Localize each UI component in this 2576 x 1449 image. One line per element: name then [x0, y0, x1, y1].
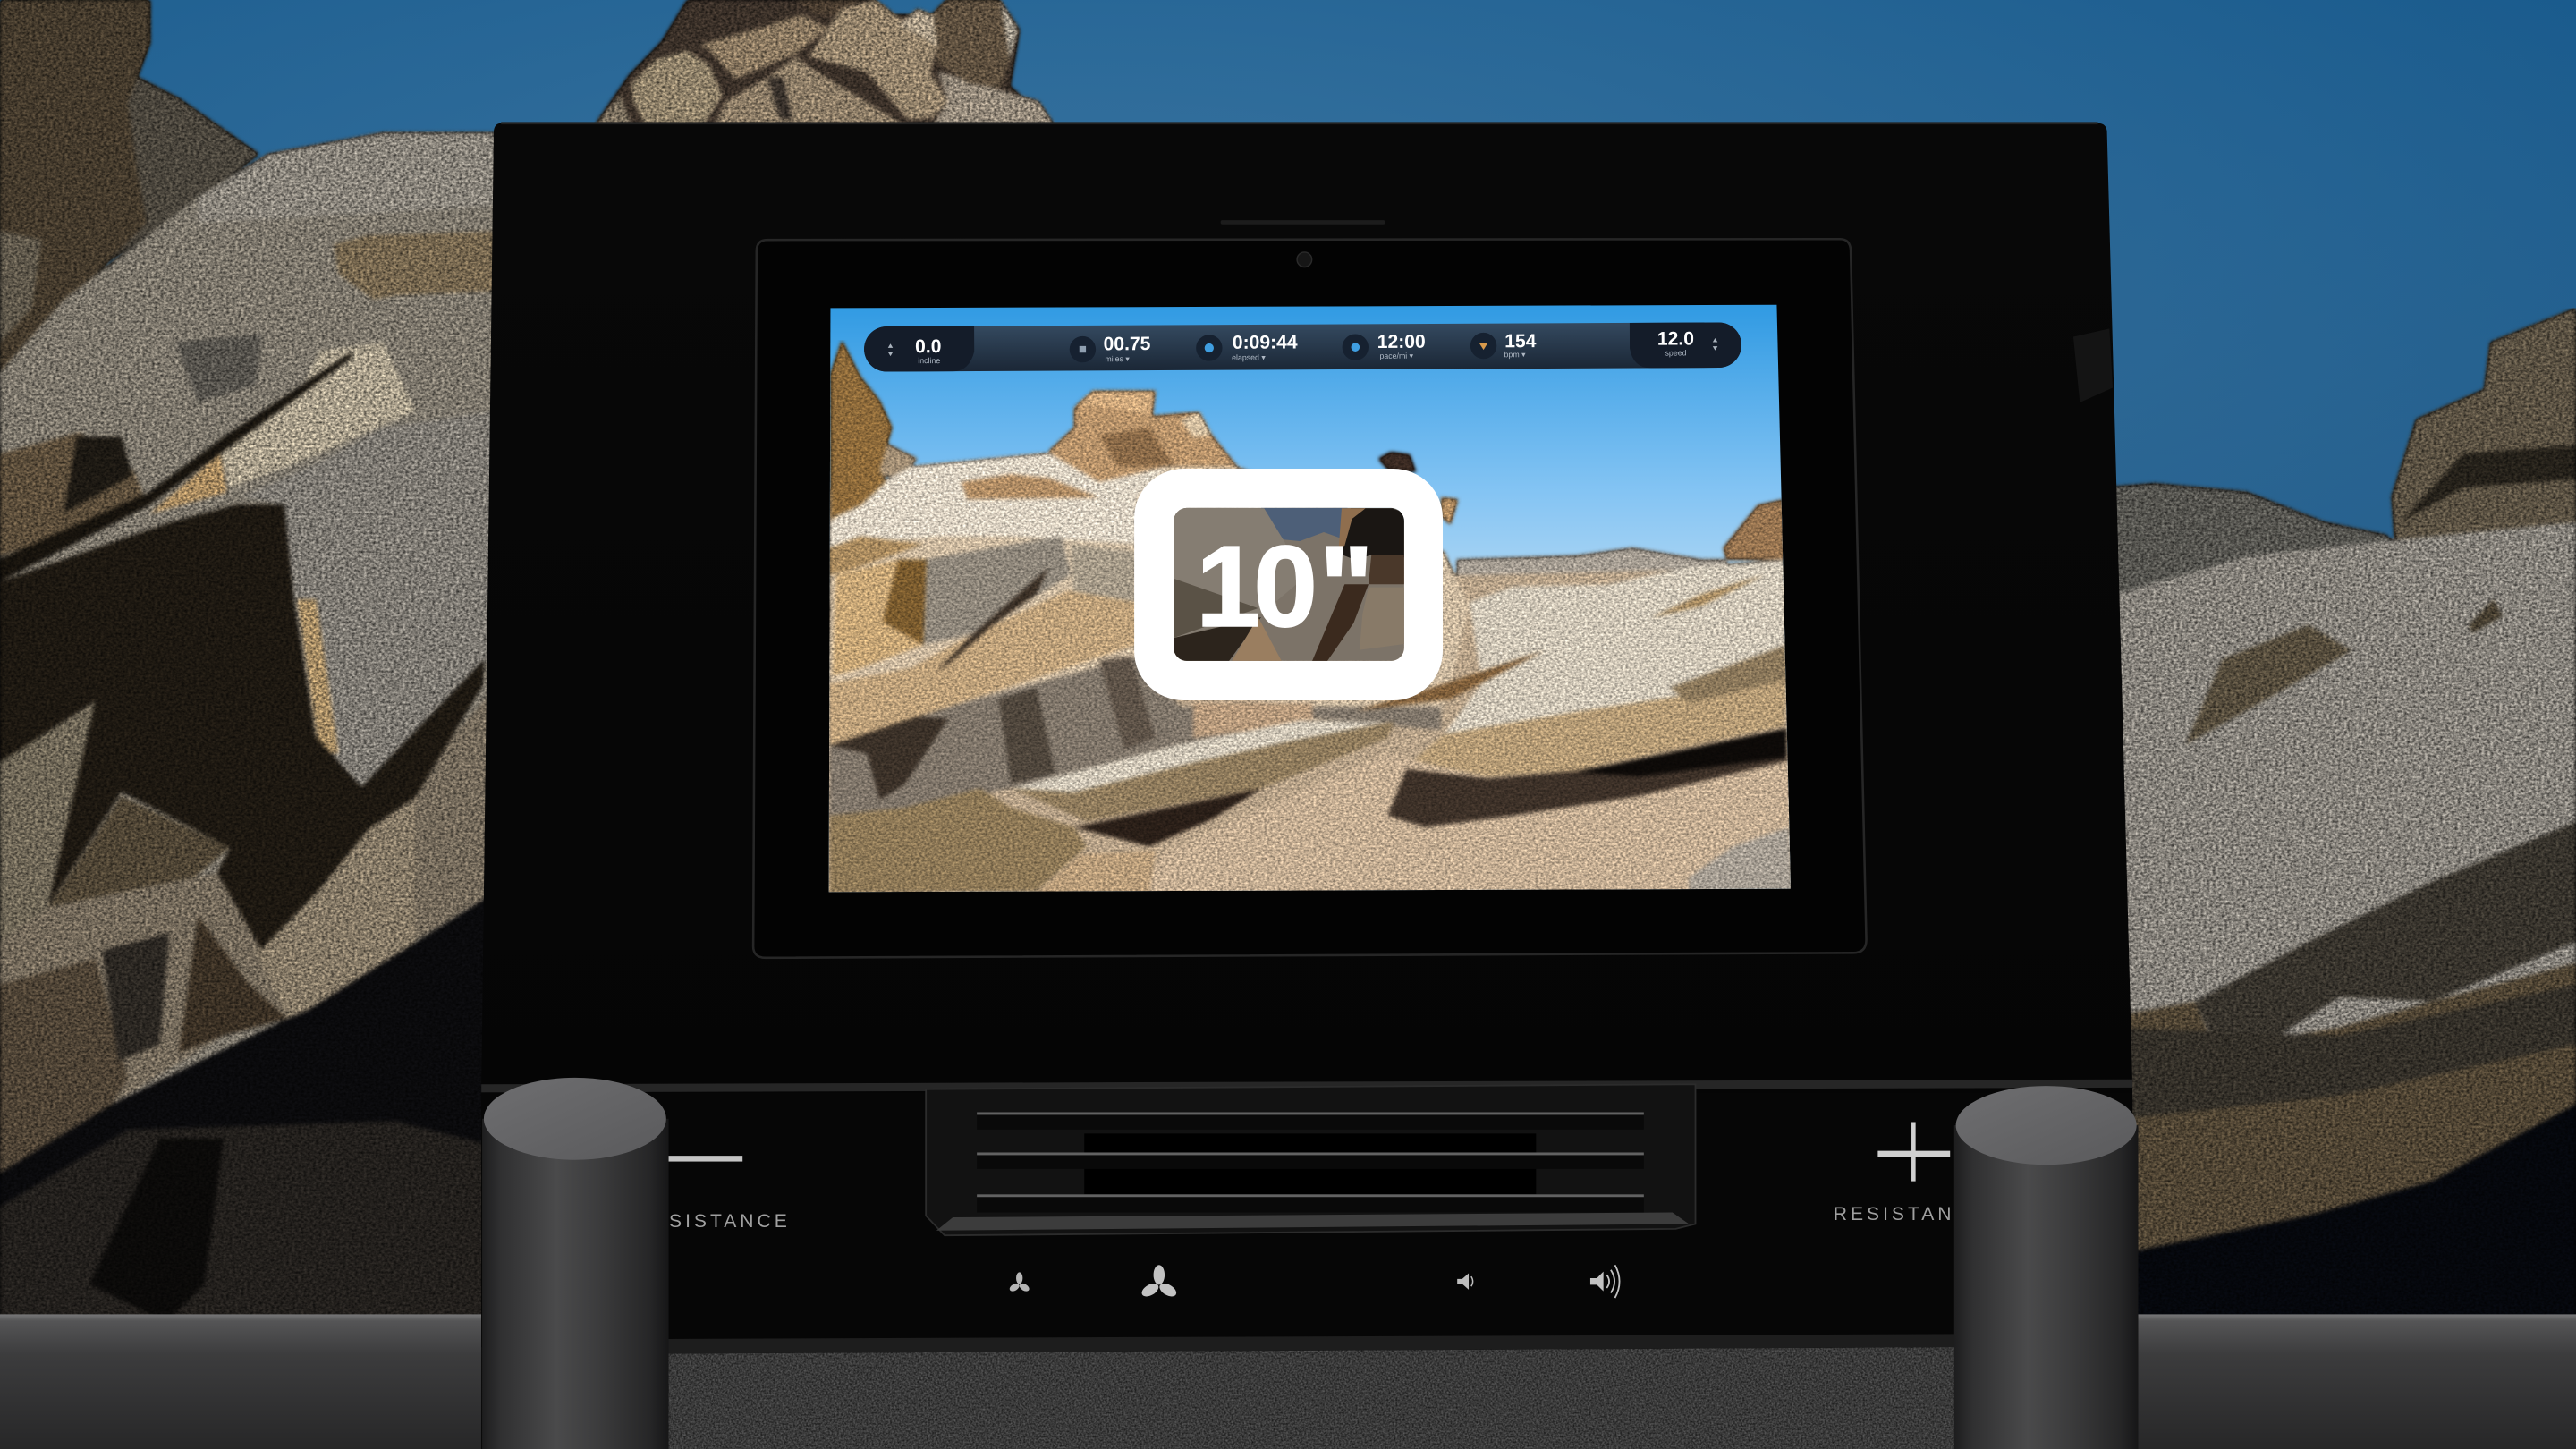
plus button — [1877, 1122, 1950, 1182]
metric labels: incline — [918, 356, 940, 365]
console body — [481, 123, 2132, 1449]
speed controls — [1713, 338, 1717, 351]
metric labels: elapsed ▾ — [1232, 352, 1266, 362]
foreground rock — [1150, 755, 1789, 891]
person — [1378, 452, 1458, 524]
air vent — [926, 1084, 1696, 1235]
metric values: 154 — [1504, 331, 1537, 352]
incline cap — [864, 326, 974, 372]
distant boulder cairn above console — [595, 0, 1055, 125]
metric values — [915, 328, 1694, 357]
diagonal slab — [1012, 720, 1394, 821]
lower left — [1037, 851, 1156, 893]
minus button — [665, 1156, 742, 1162]
icon: small fan — [1008, 1272, 1030, 1292]
lower console rim — [667, 1334, 1955, 1353]
metric values: 00.75 — [1104, 334, 1151, 354]
metric labels: speed — [1665, 348, 1687, 358]
icon: high volume — [1590, 1265, 1620, 1298]
metric values: 12.0 — [1657, 328, 1694, 350]
right slab — [1445, 556, 1785, 735]
screen photo — [821, 296, 1799, 895]
main rock mass — [830, 463, 1470, 712]
metric labels: bpm ▾ — [1504, 350, 1526, 359]
metric labels: pace/mi ▾ — [1379, 352, 1414, 360]
handrail left — [0, 1314, 493, 1449]
metric labels — [918, 348, 1687, 365]
metric icons — [1070, 333, 1496, 362]
metrics bar — [864, 322, 1741, 372]
speaker fabric — [667, 1347, 1955, 1449]
metric values: 12:00 — [1377, 332, 1426, 352]
screen bezel — [753, 239, 1867, 958]
pine tree — [831, 340, 892, 519]
top-right boulder — [1724, 499, 1784, 559]
left resistance label: RESISTANCE — [636, 1211, 787, 1232]
icon: low volume — [1457, 1273, 1473, 1290]
right upright post — [1954, 1086, 2139, 1449]
camera — [1297, 252, 1312, 267]
left rock formation — [0, 0, 498, 1335]
rock base — [823, 567, 1792, 895]
left upright post — [482, 1078, 669, 1449]
under cliff — [829, 657, 1441, 819]
icon: large fan — [1140, 1265, 1179, 1299]
handrail right — [2129, 1314, 2576, 1449]
metric values: 0:09:44 — [1233, 332, 1298, 353]
rock cairn — [1049, 391, 1237, 482]
badge inner photo — [1173, 507, 1404, 662]
badge text: 10" — [1196, 523, 1374, 651]
metric values: 0.0 — [915, 336, 941, 357]
metric labels: miles ▾ — [1105, 354, 1130, 363]
dry bush — [829, 788, 1087, 893]
right rock formation — [2099, 308, 2576, 1335]
speed cap — [1630, 322, 1741, 368]
10 inch badge — [1134, 469, 1443, 700]
right resistance label: RESISTANCE — [1834, 1204, 1985, 1224]
incline controls — [888, 343, 893, 356]
vent slats — [977, 1112, 1644, 1213]
far mountain — [1453, 545, 1730, 578]
